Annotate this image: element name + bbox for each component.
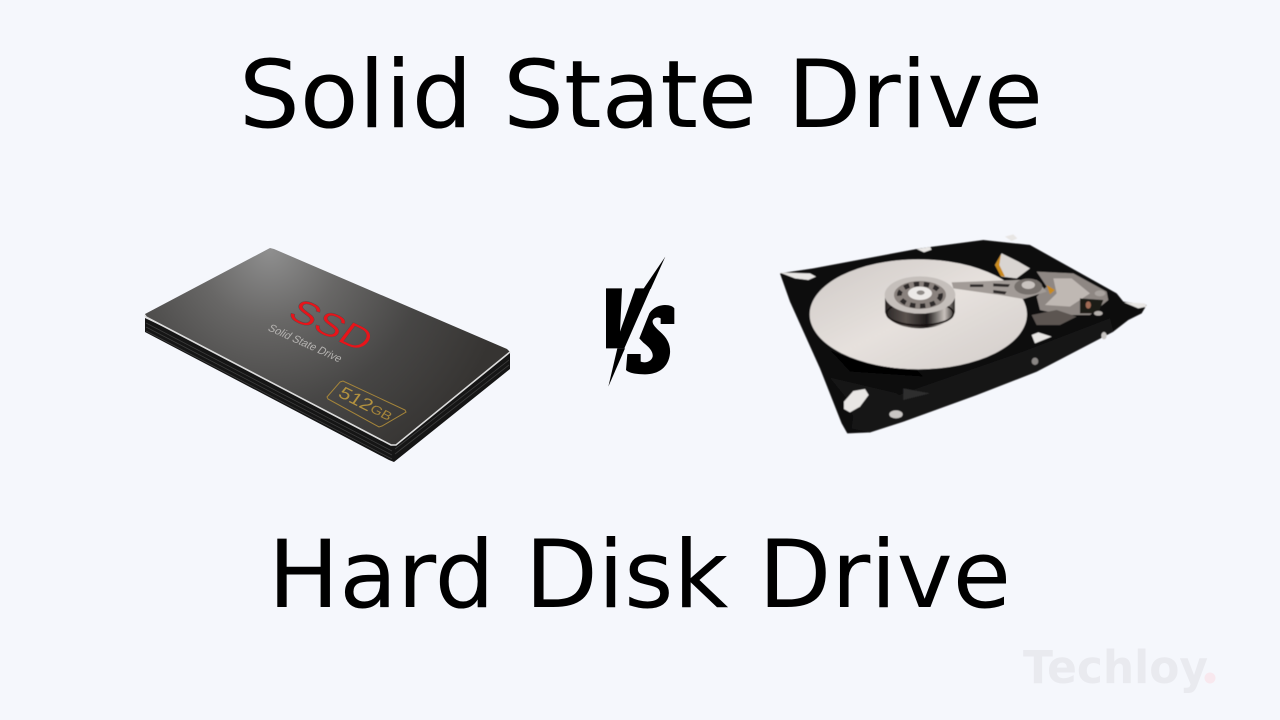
SSD subtitle: Solid State Drive [265, 322, 345, 365]
SSD red label: SSD [281, 292, 381, 359]
SSD capacity badge: 512 [335, 383, 378, 415]
SSD capacity badge: GB [367, 402, 395, 423]
letter V [606, 288, 651, 348]
HDD lower lip [830, 378, 903, 417]
icon: HDD drive [780, 234, 1147, 433]
HDD read arm [952, 280, 1047, 299]
icon: VS badge [606, 257, 674, 387]
slash bottom [608, 348, 625, 387]
SSD side body [145, 318, 510, 462]
title: Hard Disk Drive: Hard Disk Drive [268, 521, 1011, 630]
watermark dot [1204, 672, 1216, 684]
title: Solid State Drive: Solid State Drive [239, 41, 1043, 150]
HDD platter [810, 259, 1027, 369]
slash top [643, 257, 665, 289]
SSD silver edge [145, 315, 510, 445]
watermark: Techloy: Techloy [1023, 641, 1208, 694]
HDD mounting tabs [780, 234, 1147, 418]
HDD front wall highlight [852, 318, 1113, 432]
SSD side ridges [146, 323, 509, 459]
HDD chassis [780, 240, 1147, 433]
SSD top face [145, 248, 510, 446]
HDD flex cable [995, 253, 1030, 278]
icon: SSD drive [145, 248, 510, 462]
HDD platter shadow [830, 350, 923, 377]
letter S [626, 305, 674, 374]
HDD pivot bearing [1014, 279, 1042, 295]
SSD capacity badge [327, 381, 406, 427]
HDD actuator assembly [1032, 272, 1108, 325]
HDD spindle [885, 276, 955, 328]
